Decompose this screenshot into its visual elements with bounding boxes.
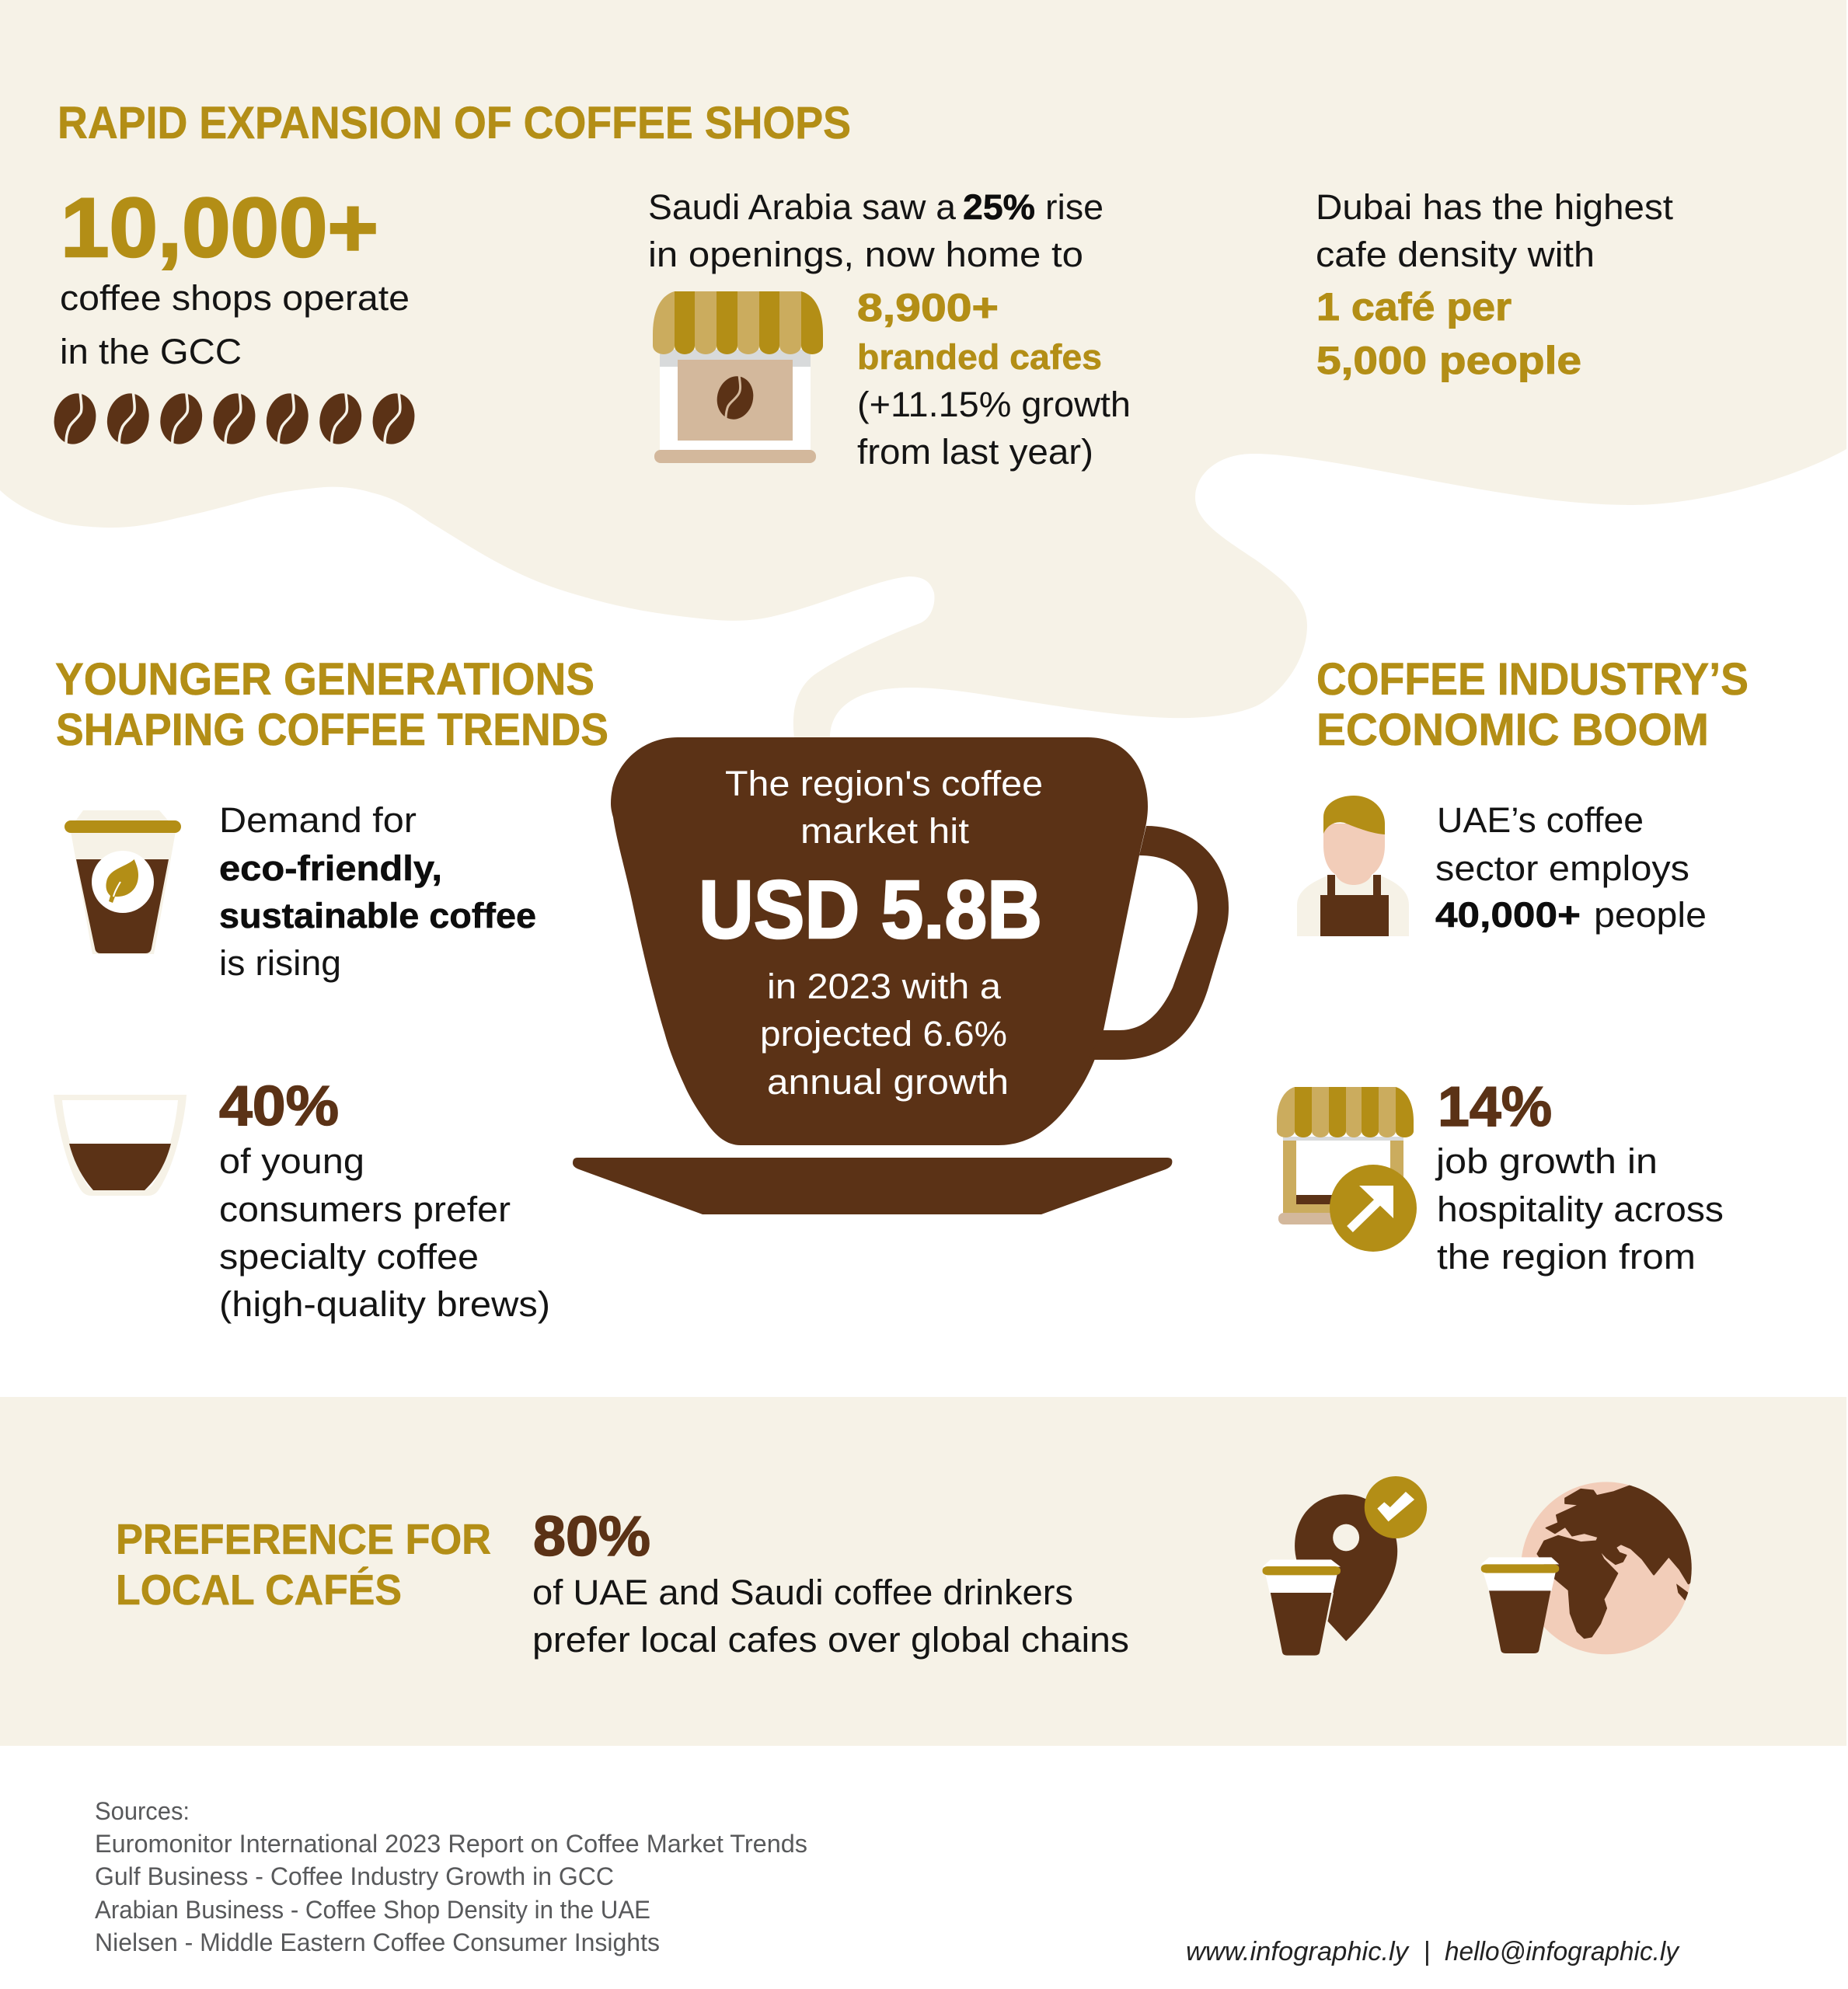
icon: shop with growth arrow [1277,1087,1417,1252]
stat: 80% prefer local: of UAE and Saudi coffee drinkers [532,1573,1073,1612]
stat: 14% job growth: job growth in [1435,1141,1658,1181]
text: Saudi Arabia rise: 25% [963,187,1035,227]
text: Saudi Arabia rise [648,187,1104,274]
text: eco-friendly demand [219,800,536,983]
stat: 14% job growth: the region from [1437,1237,1696,1277]
stat: 80% prefer local [532,1506,1129,1660]
text: UAE employment: 40,000+ [1435,895,1581,935]
sources: Gulf Business - Coffee Industry Growth in GCC [95,1862,614,1890]
market size text: projected 6.6% [760,1014,1007,1054]
market size text: USD 5.8B [699,864,1042,956]
heading: younger generations [55,654,608,755]
central coffee cup [573,737,1229,1214]
stat: 40% specialty coffee [219,1075,550,1324]
stat: 80% prefer local: 80% [533,1506,650,1568]
heading: younger generations: SHAPING COFFEE TRENDS [56,705,608,755]
text: Dubai density: 1 café per [1316,285,1512,329]
heading: preference: PREFERENCE FOR [116,1515,491,1563]
stat: 8,900+ branded cafes: (+11.15% growth [857,385,1131,424]
sources: Sources: [95,1797,190,1825]
heading: preference: LOCAL CAFÉS [116,1566,402,1614]
market size text: The region's coffee [725,764,1043,803]
icon: location pin with cup [1263,1476,1427,1656]
stat: 10,000+ coffee shops: coffee shops operate [60,278,410,318]
text: Dubai density [1316,187,1674,382]
stat: 40% specialty coffee: 40% [219,1075,339,1137]
footer contact: | [1424,1937,1431,1966]
sources: Arabian Business - Coffee Shop Density in the UAE [95,1896,650,1924]
cup handle [1088,826,1229,1060]
text: UAE employment: people [1594,895,1707,935]
stat: 40% specialty coffee: (high-quality brews) [219,1284,550,1324]
heading: preference [116,1515,491,1614]
market size text: annual growth [767,1062,1009,1102]
icon: eco takeaway cup [65,810,181,954]
stat: 8,900+ branded cafes: 8,900+ [857,286,999,329]
stat: 80% prefer local: prefer local cafes over global chains [532,1620,1129,1660]
cream steam panel [0,0,1846,738]
text: UAE employment: UAE’s coffee [1437,800,1644,840]
stat: 14% job growth: 14% [1438,1076,1552,1138]
stat: 10,000+ coffee shops: in the GCC [60,332,242,371]
stat: 14% job growth: hospitality across [1437,1190,1724,1229]
text: Dubai density: Dubai has the highest [1316,187,1674,227]
cup body [611,737,1148,1145]
heading: economic boom: COFFEE INDUSTRY’S [1316,654,1749,705]
footer contact: hello@infographic.ly [1445,1937,1680,1966]
icon: globe with cup [1481,1482,1697,1654]
stat: 14% job growth [1435,1076,1724,1277]
heading: rapid expansion: RAPID EXPANSION OF COFFEE SHOPS [58,98,851,148]
stat: 10,000+ coffee shops: 10,000+ [61,180,378,274]
sources: Euromonitor International 2023 Report on Coffee Market Trends [95,1830,807,1858]
footer contact [1186,1937,1680,1966]
footer contact: www.infographic.ly [1186,1937,1410,1966]
sources [95,1797,807,1956]
stat: 8,900+ branded cafes: branded cafes [857,337,1102,377]
heading: economic boom: ECONOMIC BOOM [1316,705,1709,755]
text: UAE employment: sector employs [1435,848,1689,888]
saucer [573,1158,1172,1214]
stat: 10,000+ coffee shops [60,180,410,371]
stat: 40% specialty coffee: consumers prefer [219,1190,511,1229]
market size text: market hit [800,811,970,851]
icon: barista [1297,796,1409,936]
heading: younger generations: YOUNGER GENERATIONS [55,654,594,705]
panel: preference for local cafes [0,1397,1846,1746]
icon: row of coffee beans [49,389,420,448]
stat: 40% specialty coffee: of young [219,1141,364,1181]
text: eco-friendly demand: eco-friendly, [219,848,442,888]
stat: 8,900+ branded cafes: from last year) [857,432,1093,472]
text: eco-friendly demand: is rising [219,943,341,983]
text: eco-friendly demand: sustainable coffee [219,896,536,935]
text: UAE employment [1435,800,1707,935]
text: eco-friendly demand: Demand for [219,800,417,840]
heading: economic boom [1316,654,1749,755]
text: Saudi Arabia rise: rise [1045,187,1104,227]
icon: espresso glass [54,1095,187,1196]
stat: 8,900+ branded cafes [857,286,1131,472]
stat: 40% specialty coffee: specialty coffee [219,1237,479,1277]
text: Saudi Arabia rise: in openings, now home to [648,235,1083,274]
market size text: in 2023 with a [767,967,1002,1006]
text: Saudi Arabia rise: Saudi Arabia saw a [648,187,957,227]
sources: Nielsen - Middle Eastern Coffee Consumer Insights [95,1928,660,1956]
market size text [699,764,1043,1102]
text: Dubai density: 5,000 people [1316,339,1581,382]
text: Dubai density: cafe density with [1316,235,1595,274]
icon: coffee shop [653,291,823,463]
